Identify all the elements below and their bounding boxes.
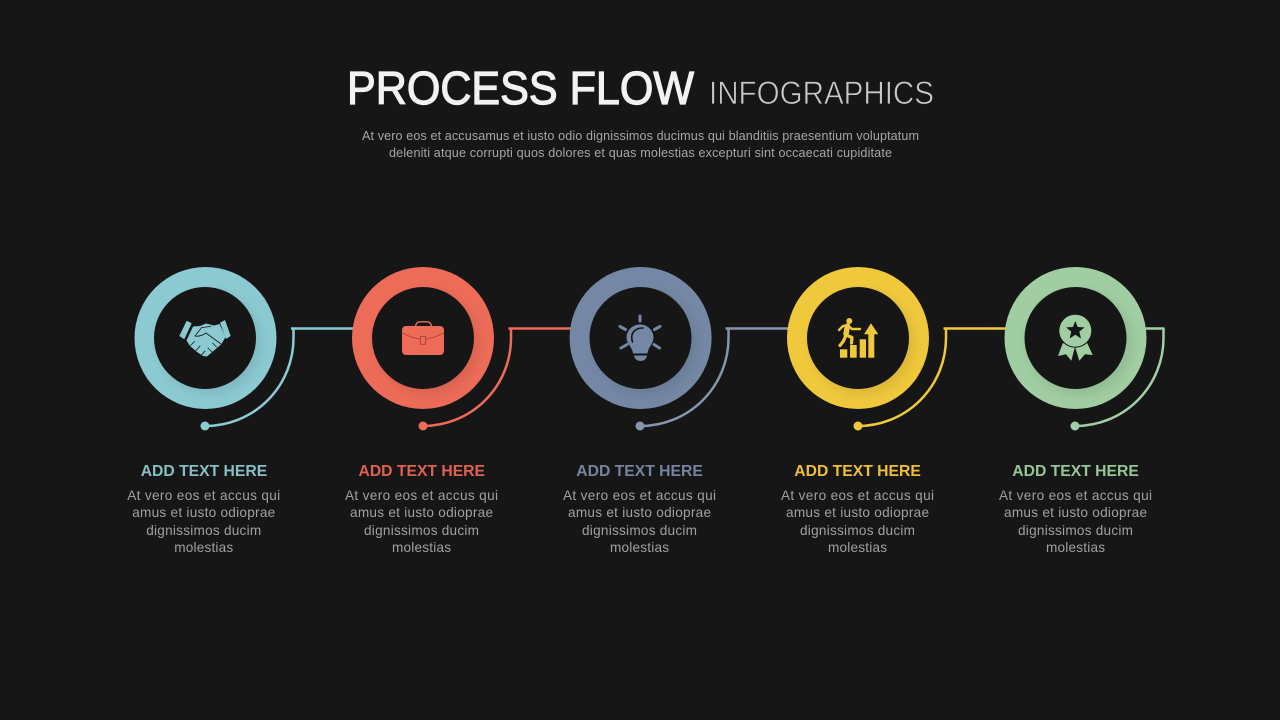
- description: [345, 488, 498, 555]
- description: molestias: [174, 540, 233, 555]
- description: At vero eos et accus qui: [127, 488, 280, 503]
- header: [347, 62, 934, 160]
- step 5: [999, 267, 1164, 555]
- icon: briefcase: [402, 322, 444, 355]
- icon: climbing growth chart: [839, 318, 878, 358]
- description: dignissimos ducim: [800, 523, 915, 538]
- description: [563, 488, 716, 555]
- step 4: [781, 267, 1006, 555]
- ring: [570, 267, 712, 409]
- step 1: [127, 267, 353, 555]
- icon: handshake: [179, 320, 231, 356]
- description: amus et iusto odioprae: [350, 505, 493, 520]
- description: dignissimos ducim: [364, 523, 479, 538]
- ring: [134, 267, 276, 409]
- connector: [418, 328, 571, 430]
- title: infographics: INFOGRAPHICS: [709, 75, 934, 111]
- icon: award badge: [1058, 314, 1093, 361]
- description: At vero eos et accus qui: [781, 488, 934, 503]
- heading: ADD TEXT HERE: [141, 463, 268, 480]
- description: At vero eos et accus qui: [999, 488, 1152, 503]
- description: amus et iusto odioprae: [568, 505, 711, 520]
- description: dignissimos ducim: [1018, 523, 1133, 538]
- connector: [200, 328, 353, 430]
- subtitle: deleniti atque corrupti quos dolores et quas molestias excepturi sint occaecati cupiditate: [389, 146, 892, 160]
- description: molestias: [1046, 540, 1105, 555]
- ring: [787, 267, 929, 409]
- ring: [1004, 267, 1146, 409]
- connector: [854, 328, 1006, 430]
- ring: [352, 267, 494, 409]
- description: [999, 488, 1152, 555]
- subtitle: At vero eos et accusamus et iusto odio dignissimos ducimus qui blanditiis praesentium voluptatum: [362, 129, 919, 143]
- subtitle: [362, 129, 919, 160]
- description: [781, 488, 934, 555]
- heading: ADD TEXT HERE: [576, 463, 703, 480]
- step 3: [563, 267, 788, 555]
- process flow infographic: [127, 70, 1165, 552]
- heading: ADD TEXT HERE: [1012, 463, 1139, 480]
- description: amus et iusto odioprae: [1004, 505, 1147, 520]
- description: amus et iusto odioprae: [132, 505, 275, 520]
- step 2: [345, 267, 571, 555]
- heading: ADD TEXT HERE: [358, 463, 485, 480]
- description: molestias: [610, 540, 669, 555]
- connector: [636, 328, 788, 430]
- heading: ADD TEXT HERE: [794, 463, 921, 480]
- description: molestias: [828, 540, 887, 555]
- icon: light bulb: [620, 316, 660, 361]
- description: dignissimos ducim: [146, 523, 261, 538]
- description: [127, 488, 280, 555]
- title: process flow: PROCESS FLOW: [347, 62, 695, 114]
- description: dignissimos ducim: [582, 523, 697, 538]
- description: molestias: [392, 540, 451, 555]
- description: amus et iusto odioprae: [786, 505, 929, 520]
- description: At vero eos et accus qui: [563, 488, 716, 503]
- description: At vero eos et accus qui: [345, 488, 498, 503]
- connector: [1070, 328, 1164, 430]
